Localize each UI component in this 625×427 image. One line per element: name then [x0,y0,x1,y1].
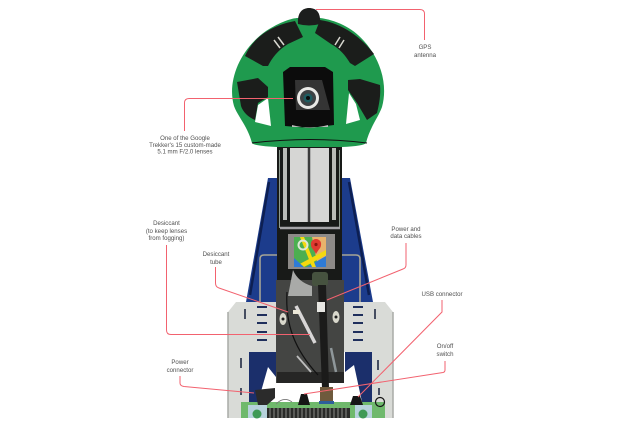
main lens [297,87,319,109]
label: desiccant tube: Desiccant [203,251,230,258]
centre lens bay [283,67,334,128]
filter panel [290,148,329,222]
power and data cable [312,272,334,404]
label: on/off switch: switch [437,351,453,358]
callout line: on/off switch [304,361,445,394]
callout line: power and data cables [327,243,406,300]
green circuit board [241,402,385,418]
upper camera windows [245,20,374,66]
label: on/off switch: On/off [437,343,454,350]
label: lens: 5.1 mm F/2.0 lenses [157,148,213,156]
callout line: lens [184,98,293,131]
carrying rails [260,255,360,302]
label: lens: One of the Google [160,135,211,142]
desiccant tube [287,292,336,375]
label: desiccant: (to keep lenses [146,228,187,235]
label: power and data cables: data cables [390,233,422,240]
label: power and data cables: Power and [391,226,421,233]
connectors and switch [255,388,384,406]
callout line: USB connector [358,300,442,397]
label: GPS antenna: antenna [414,52,437,59]
metal electronics box [276,270,344,383]
label: power connector: Power [171,359,189,366]
label: power connector: connector [167,367,193,374]
callout line: GPS antenna [316,10,424,40]
GPS antenna cap [298,8,320,26]
label: GPS antenna: GPS [419,44,431,51]
callout line: desiccant [166,245,310,334]
callout line: power connector [180,376,254,393]
blue support legs [246,178,373,302]
white side gaps [255,93,360,126]
callout line: desiccant tube [216,267,288,312]
label: desiccant: Desiccant [153,220,180,227]
grey mounting plates [228,302,393,418]
side camera windows [237,78,380,120]
label: desiccant: from fogging) [149,235,184,242]
screen with Google Maps icon [288,234,335,269]
label: USB connector: USB connector [422,291,462,298]
label: lens: Trekker's 15 custom-made [149,142,221,149]
label: desiccant tube: tube [210,259,223,266]
central tower frame [277,147,342,282]
green camera dome [232,18,384,147]
